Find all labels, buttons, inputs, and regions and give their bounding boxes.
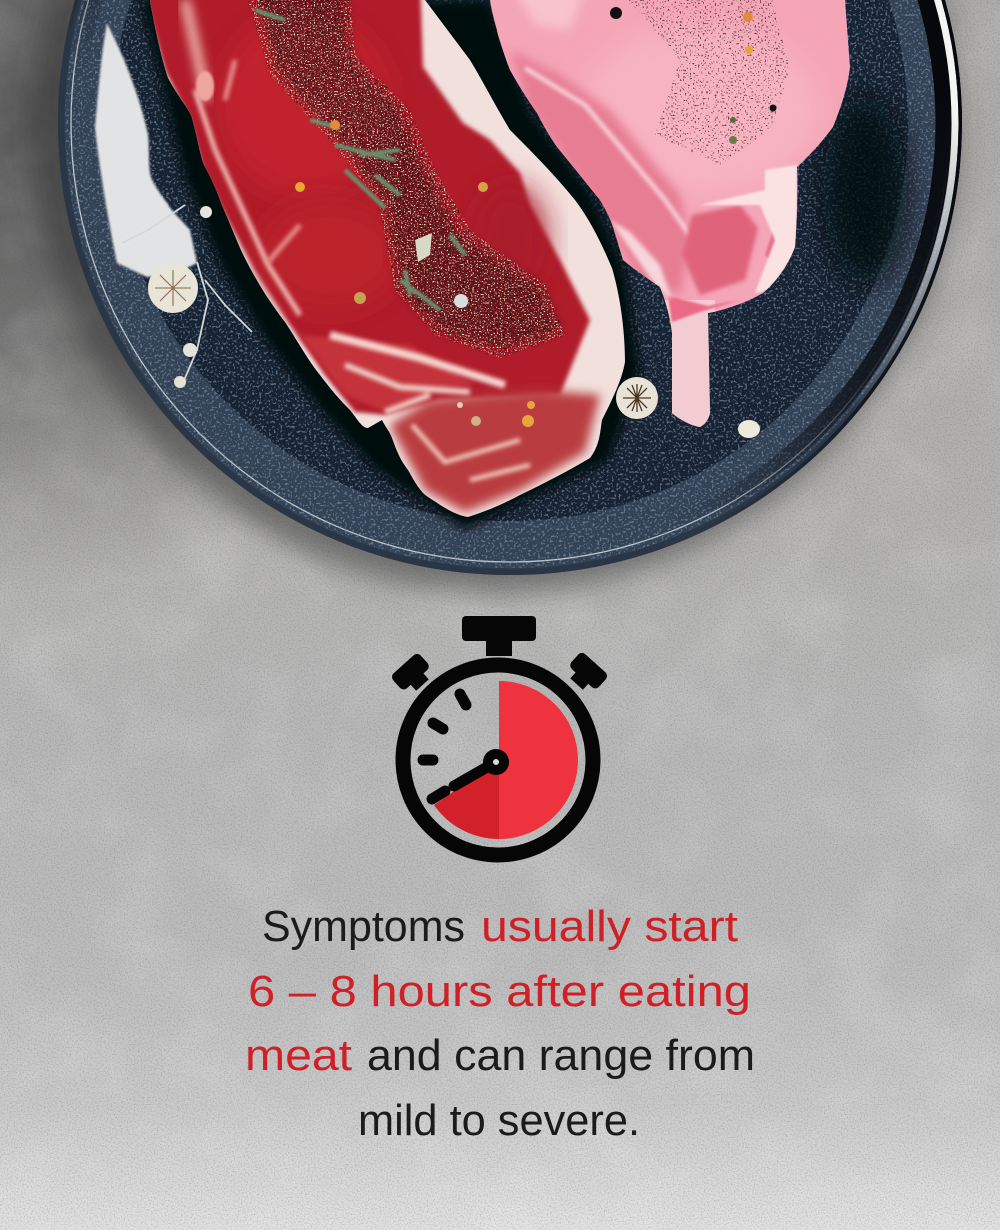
- tick marks: [423, 694, 466, 760]
- dark pool on plate: [823, 95, 907, 285]
- line 3: and can range from: [367, 1031, 755, 1080]
- line 4: mild to severe.: [358, 1096, 640, 1145]
- top cap: [462, 616, 536, 641]
- plate speckle: [65, 0, 955, 568]
- beef seasoning: [245, 0, 565, 358]
- clock hand: [432, 762, 496, 799]
- herbs: [255, 10, 465, 310]
- flower icons on plate: [148, 263, 198, 313]
- right side button: [563, 651, 609, 696]
- pork seasoning: [620, 0, 790, 165]
- rib bone: [665, 300, 715, 440]
- left side button: [390, 652, 436, 697]
- photo: plate with raw meat: [33, 0, 962, 592]
- line 1: Symptoms: [262, 902, 465, 951]
- red lean meat: [140, 0, 590, 415]
- branch lines: [122, 205, 252, 385]
- line 3: meat: [245, 1031, 352, 1080]
- marbling streaks: [195, 90, 300, 315]
- dial ring: [403, 665, 593, 855]
- line 1: [262, 902, 738, 951]
- text block: symptoms onset: [245, 902, 755, 1145]
- pork chop: [480, 0, 860, 440]
- lower marbled section: [300, 335, 475, 412]
- plate rim: [85, 0, 935, 548]
- right rim black and white bands: [76, 0, 944, 557]
- line 1: usually start: [481, 902, 738, 951]
- red elapsed sector: [499, 681, 578, 839]
- fat nub: [196, 71, 214, 101]
- line 2: 6 – 8 hours after eating: [248, 967, 751, 1016]
- beef steak: [140, 0, 640, 530]
- dark blue plate: [58, 0, 962, 575]
- black shadow under beef: [140, 0, 640, 530]
- lean band: [510, 50, 690, 295]
- icon: stopwatch: [390, 616, 609, 855]
- plate shadow: [33, 0, 957, 592]
- white glaze patch: [95, 23, 197, 277]
